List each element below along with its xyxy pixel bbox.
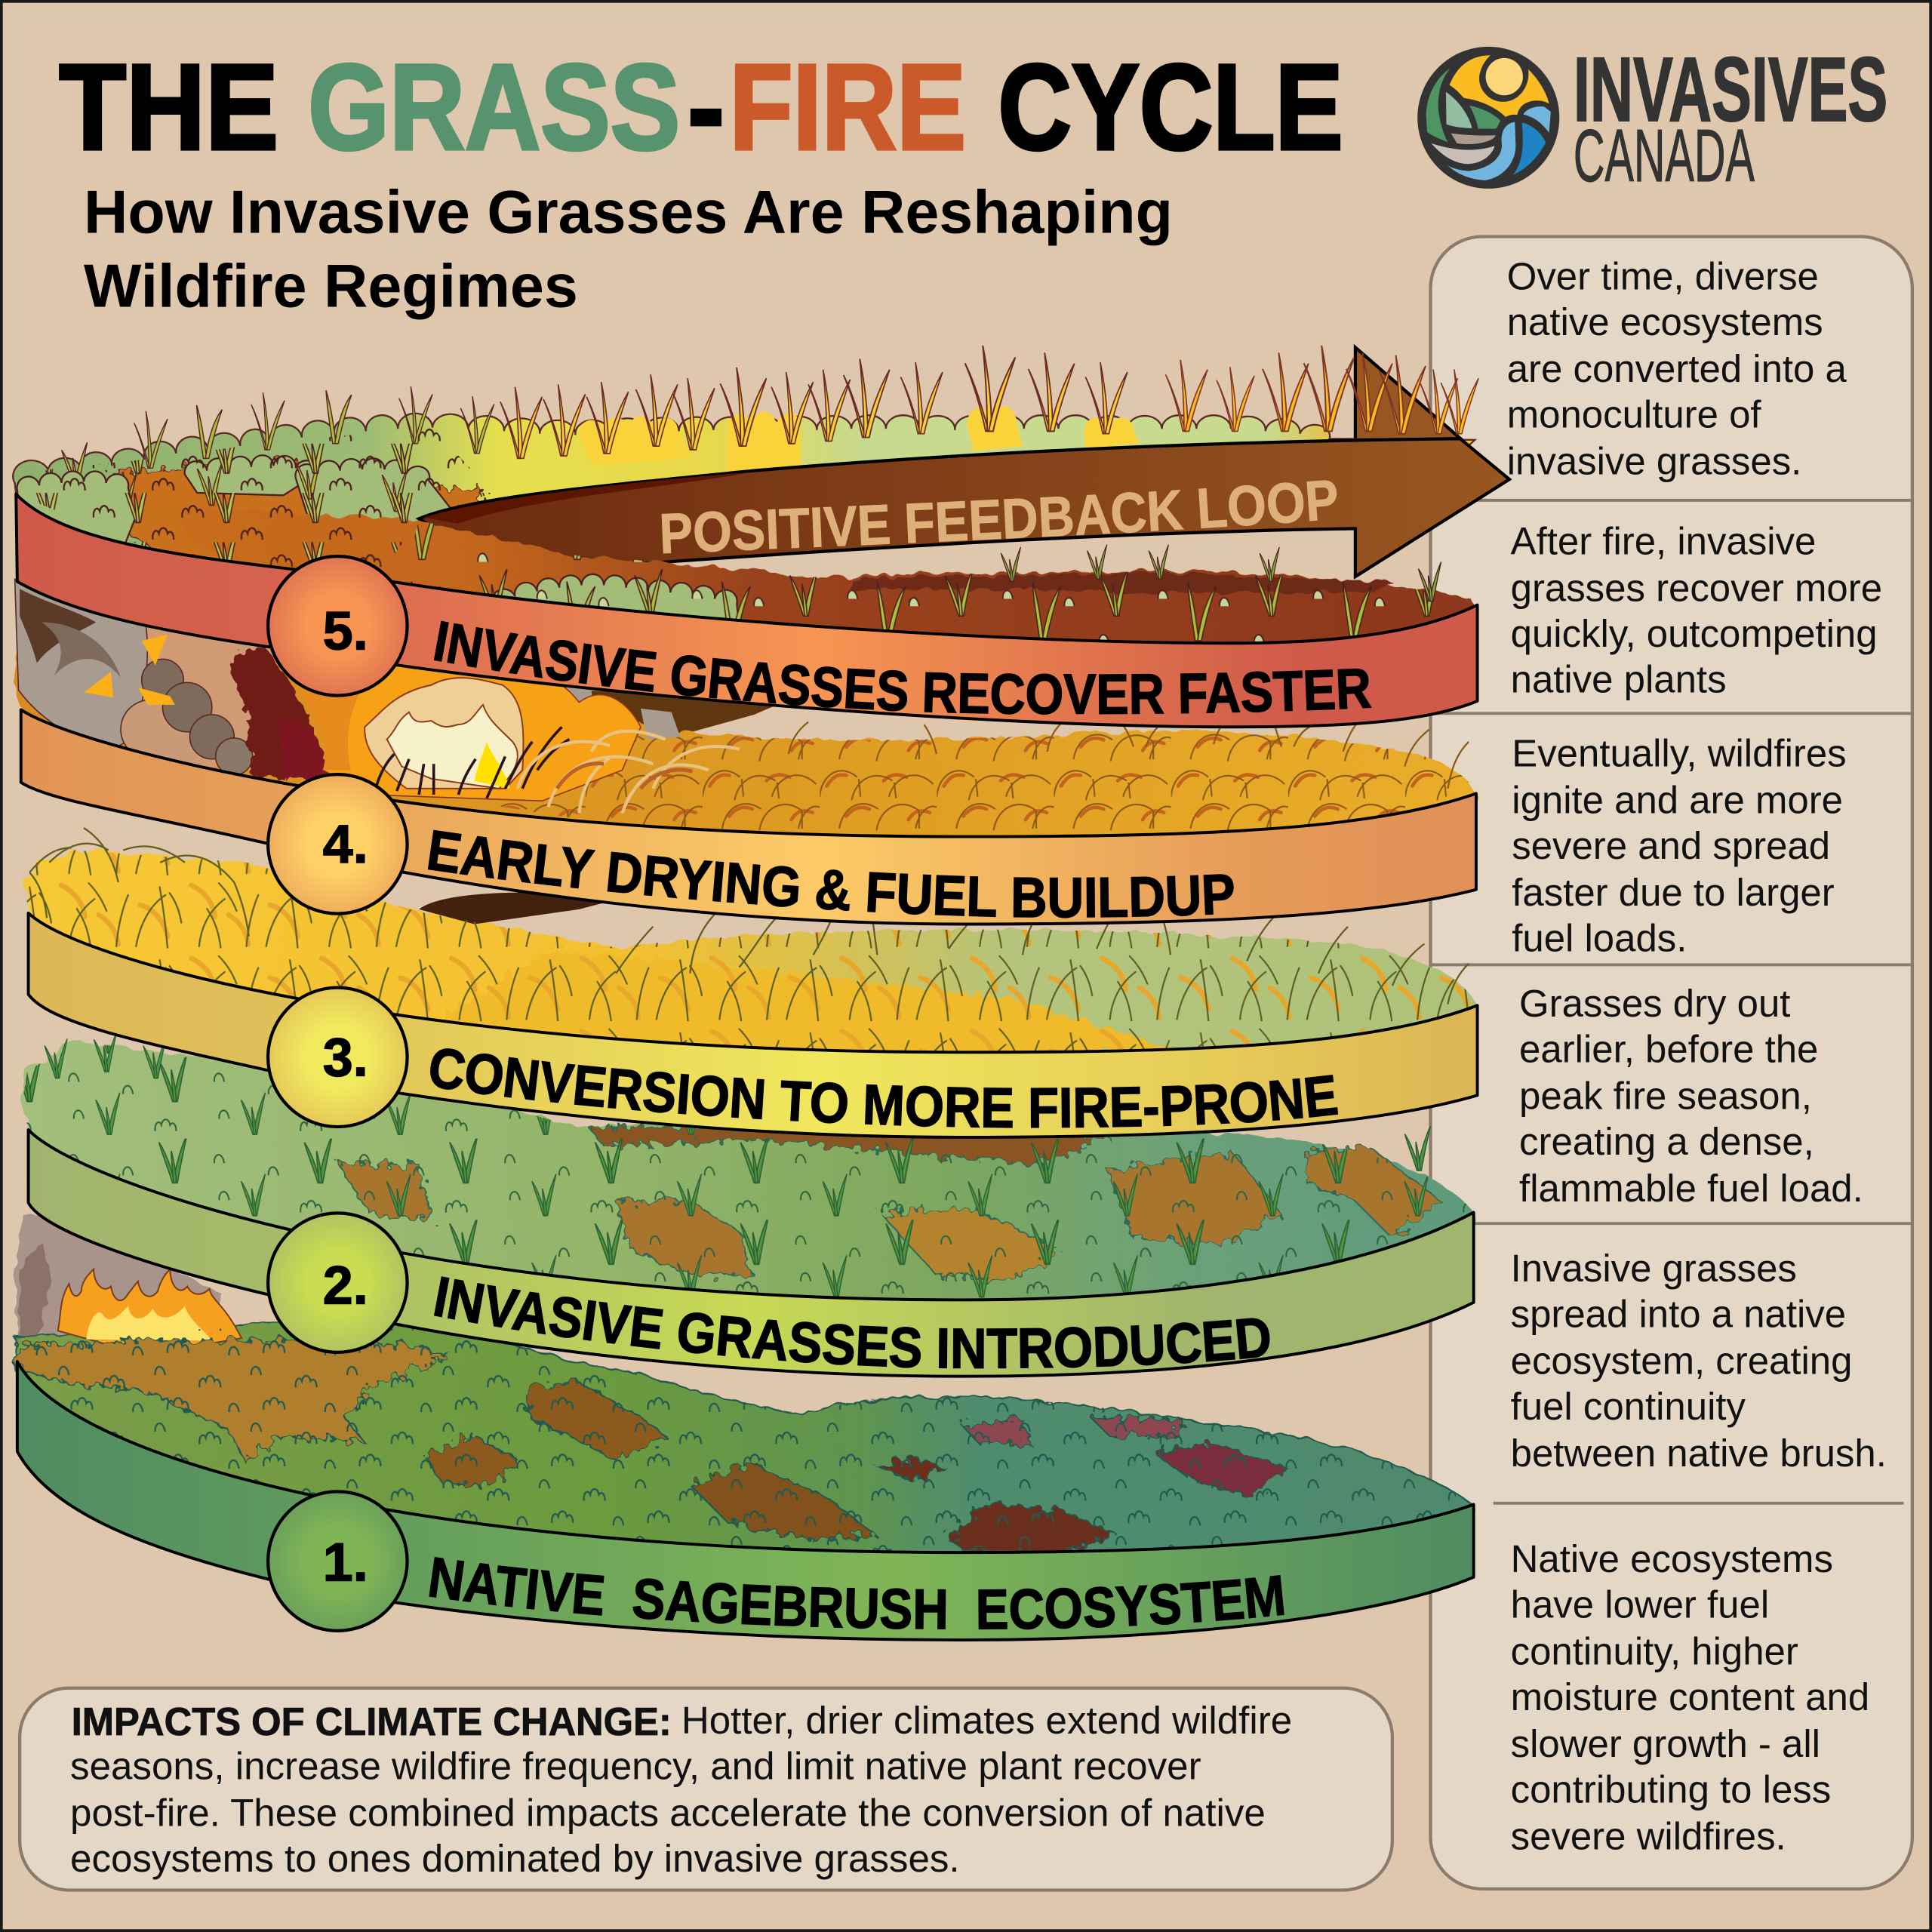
text: climate change impacts: seasons, increase wildfire frequency, and limit native plant recover [70,1745,1201,1788]
skyline grass stems [29,828,1469,1004]
surface: cured grass [15,592,1476,849]
text: stage 3 description: peak fire season, [1519,1074,1812,1117]
band 1 [17,1361,1474,1640]
panel: stage descriptions [1431,236,1912,1889]
label 5: INVASIVE GRASSES RECOVER FASTER [433,620,1372,715]
surface: dry grass [25,851,1478,1065]
text: stage 1 description: moisture content and [1511,1675,1869,1718]
stage 1: native sagebrush ecosystem [12,1183,1475,1641]
badge 5: 5. [323,601,368,661]
drooping blades [25,851,1478,1065]
label 4: EARLY DRYING & FUEL BUILDUP [427,830,1234,918]
text: stage 1 description: slower growth - all [1511,1722,1820,1765]
badge 2 [268,1213,408,1352]
text: stage 2 description: spread into a native [1511,1292,1846,1335]
badge 4 [268,774,408,914]
yellow tufts on back strip [579,407,1140,473]
text: stage 4 description: fuel loads. [1512,916,1687,959]
logo wordmark [1574,38,1887,197]
badge 2: 2. [323,1255,368,1315]
text: stage 1 description: severe wildfires. [1511,1815,1786,1858]
text: stage 4 description: faster due to larger [1512,871,1835,914]
seedlings along soil edge [1001,545,1441,601]
text: stage 1 description: continuity, higher [1511,1630,1798,1673]
badge 3: 3. [323,1027,368,1088]
label 3: CONVERSION TO MORE FIRE-PRONE [430,1048,1339,1128]
grass blades: back strip left [62,386,494,518]
skyline tufts [45,1032,1430,1171]
back grass strip [13,414,1475,579]
green patches on back strip [185,455,456,540]
subtitle: Wildfire Regimes [84,253,578,321]
bare-ground patches [339,1128,1441,1281]
title: THE [59,40,278,176]
band 2 [29,1130,1474,1377]
title: CYCLE [998,40,1343,176]
stage 2: invasive grasses introduced [20,1035,1476,1378]
text: stage 2 description: ecosystem, creating [1511,1339,1852,1382]
text: stage 4 description: Eventually, wildfires [1512,732,1847,775]
grass tufts on left ground [15,428,493,589]
text: climate change impacts: post-fire. These combined impacts accelerate the conversion of native [70,1792,1266,1835]
dark soil crack strip [851,573,1392,594]
band 4 [21,709,1476,924]
badge 1: 1. [323,1533,368,1593]
shrub outlines [14,1306,1474,1567]
grass tufts on soil [399,520,1478,656]
arched grass [468,731,1476,849]
wildfire and smoke [15,579,740,814]
text: stage 5 outcome: invasive grasses. [1507,440,1801,483]
panel background [1431,236,1912,1889]
title: - [688,40,724,176]
text: stage 5 outcome: native ecosystems [1507,300,1823,343]
front ground: recovering soil [185,508,1478,656]
orange ground at left of back strip [105,458,487,579]
text: stage 5 description: grasses recover more [1511,567,1882,610]
text: stage 5 description: quickly, outcompeting [1511,612,1878,655]
band 5 [16,494,1478,727]
smoke [15,579,680,775]
text: stage 4 description: severe and spread [1512,824,1830,867]
text: stage 2 description: Invasive grasses [1511,1247,1797,1290]
text: stage 3 description: flammable fuel load. [1519,1167,1863,1210]
text: stage 3 description [1519,982,1863,1210]
text: stage 2 description: between native brush. [1511,1432,1887,1475]
stage 5: invasive grasses recover faster [12,344,1512,729]
badge 4: 4. [323,814,368,875]
band 3 [29,913,1478,1137]
title [59,40,1343,176]
stage 3: conversion to more fire-prone [23,827,1479,1139]
flames [226,647,331,781]
green regrowth patches [17,471,740,629]
label 2: INVASIVE GRASSES INTRODUCED [433,1276,1269,1369]
text: stage 1 description [1511,1537,1869,1858]
flames [58,1269,242,1348]
text: stage 5 outcome: Over time, diverse [1507,255,1819,298]
arrow head rear barb [1355,347,1466,458]
subtitle: How Invasive Grasses Are Reshaping [84,179,1173,247]
burnt grass [376,727,569,798]
badge 5 [268,556,408,696]
text: climate change impacts: Hotter, drier climates extend wildfire [681,1699,1292,1742]
text: stage 5 outcome [1507,255,1847,483]
smoke behind small fire [15,1214,222,1349]
text: stage 1 description: Native ecosystems [1511,1537,1833,1580]
arrow: positive feedback loop [415,437,1512,580]
text: climate change impacts: ecosystems to ones dominated by invasive grasses. [70,1837,960,1880]
surface: native ground [14,1306,1474,1567]
stage 4: early drying and fuel buildup [14,578,1479,925]
badge 3 [268,988,408,1127]
badge 1 [268,1491,408,1631]
subtitle [84,179,1173,321]
text: stage 2 description [1511,1247,1887,1475]
logo: Invasives Canada [1417,38,1887,197]
text: stage 1 description: have lower fuel [1511,1583,1769,1626]
text: climate change impacts [70,1699,1292,1880]
shadow wedge under band 4 [419,893,626,924]
text: stage 4 description: ignite and are more [1512,779,1843,822]
grass tufts [22,1041,1474,1312]
grass blades: back strip middle [500,346,1128,458]
text: stage 3 description: Grasses dry out [1519,982,1790,1025]
skyline blades [789,712,1469,789]
shadow wedge under band 5 [579,690,789,740]
icon: logo roundel [1417,47,1559,189]
text: stage 5 outcome: monoculture of [1507,393,1761,436]
text: stage 3 description: creating a dense, [1519,1120,1814,1163]
text: stage 5 description: After fire, invasive [1511,520,1816,563]
title: GRASS [308,40,680,176]
panel: climate change impacts [20,1688,1392,1890]
bare-ground patches [17,1340,1287,1555]
text: stage 5 description [1511,520,1882,701]
logo wordmark: CANADA [1574,114,1755,197]
grass blades: back strip right [1165,346,1478,434]
text: stage 1 description: contributing to less [1511,1768,1831,1811]
label 1: NATIVE SAGEBRUSH ECOSYSTEM [429,1557,1284,1630]
text: stage 3 description: earlier, before the [1519,1027,1818,1070]
text: stage 2 description: fuel continuity [1511,1385,1746,1428]
surface: invaded ground [22,1041,1474,1312]
arrow label: POSITIVE FEEDBACK LOOP [661,480,1337,554]
text: climate change impacts: IMPACTS OF CLIMATE CHANGE: [72,1700,672,1744]
yellow grass patch [370,949,1189,1062]
text: stage 5 description: native plants [1511,658,1727,701]
text: stage 4 description [1512,732,1847,959]
title: FIRE [730,40,966,176]
text: stage 5 outcome: are converted into a [1507,347,1847,390]
straw arches [518,731,740,814]
